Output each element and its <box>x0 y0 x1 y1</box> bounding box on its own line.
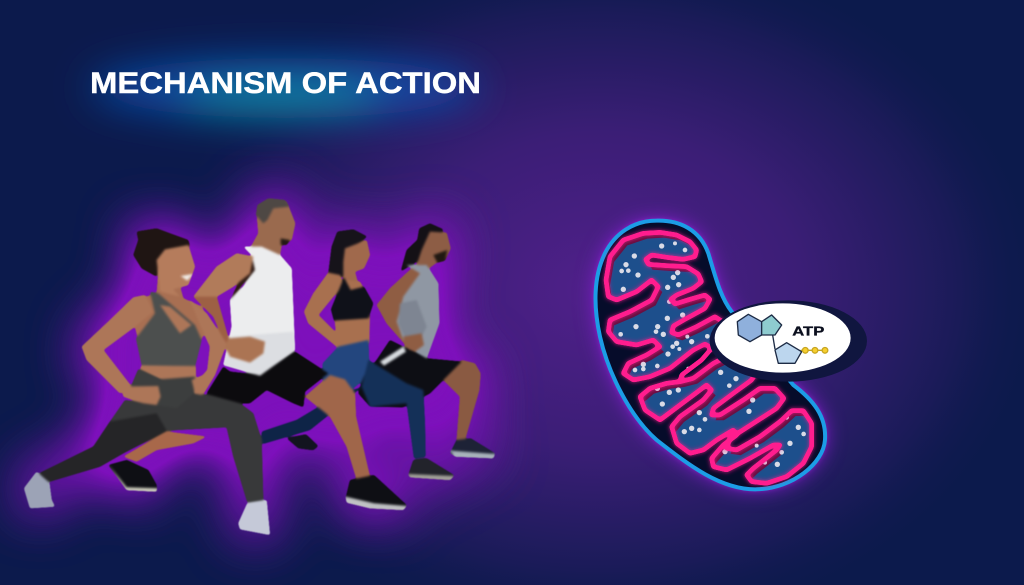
callout interior <box>715 303 851 373</box>
person: woman in grey top <box>24 228 270 535</box>
person: woman in black top <box>262 229 454 480</box>
person: man in white tank <box>108 198 407 510</box>
photo: four people lunging <box>24 198 495 535</box>
outer membrane <box>595 221 825 489</box>
cristae pink membrane <box>606 232 812 483</box>
icon: ATP molecule <box>737 314 828 363</box>
title glow <box>90 58 480 118</box>
callout border <box>710 300 867 382</box>
ATP label: ATP <box>792 324 824 339</box>
title: MECHANISM OF ACTION <box>90 67 481 100</box>
purple glow behind mitochondrion <box>595 221 825 489</box>
mitochondrion <box>595 220 830 490</box>
matrix <box>608 234 810 481</box>
person: man in grey tank <box>358 223 495 458</box>
particles <box>618 241 806 467</box>
ATP callout <box>710 300 867 382</box>
